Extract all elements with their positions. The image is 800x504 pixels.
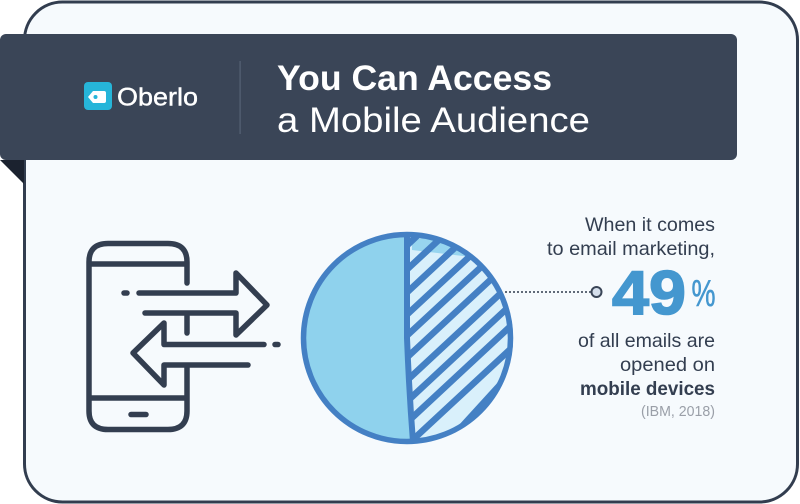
source: (IBM, 2018) bbox=[641, 404, 715, 420]
pie slice: 51 percent bbox=[304, 234, 510, 442]
big number: 49 percent bbox=[612, 259, 716, 328]
arrow: right bbox=[124, 273, 267, 335]
arrow: left bbox=[133, 323, 278, 385]
callout text bbox=[547, 214, 716, 420]
pie slice: 49 percent hatched bbox=[410, 237, 513, 438]
logo icon: price tag bbox=[84, 82, 112, 110]
pie outline bbox=[304, 234, 510, 442]
lead-in text bbox=[547, 214, 715, 260]
home button bbox=[131, 412, 146, 417]
title: You Can Access bbox=[277, 59, 552, 98]
pie divider bbox=[407, 233, 413, 442]
icon: phone with arrows bbox=[89, 244, 278, 430]
lead-in text: to email marketing, bbox=[547, 238, 715, 260]
phone dividers bbox=[89, 264, 187, 398]
banner divider bbox=[240, 61, 241, 134]
phone body bbox=[89, 244, 187, 430]
big number: 49 percent: 49 bbox=[612, 259, 686, 328]
callout leader line bbox=[505, 287, 602, 297]
banner fold bbox=[0, 160, 24, 184]
banner bbox=[0, 34, 737, 160]
lead-in text: When it comes bbox=[585, 214, 715, 236]
body text: of all emails are bbox=[578, 330, 715, 352]
title: a Mobile Audience bbox=[277, 101, 590, 140]
body text: opened on bbox=[620, 354, 715, 376]
body text bbox=[578, 330, 715, 400]
body text: mobile devices bbox=[580, 378, 715, 400]
pie chart bbox=[300, 232, 514, 444]
big number: 49 percent: % bbox=[692, 273, 716, 314]
logo wordmark: Oberlo bbox=[117, 84, 198, 112]
title bbox=[277, 59, 590, 140]
